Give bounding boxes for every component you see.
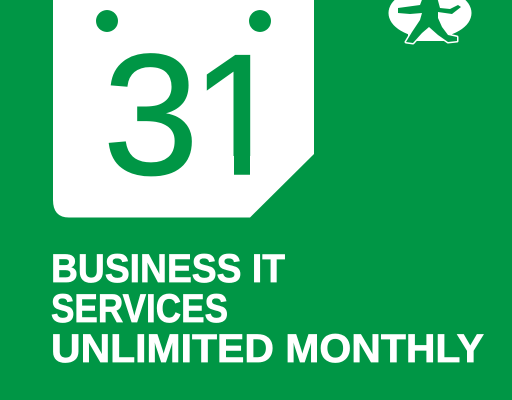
heading line 1: BUSINESS IT [51, 247, 285, 291]
icon: calendar [53, 0, 314, 218]
heading line 3: UNLIMITED MONTHLY [51, 327, 484, 371]
heading [51, 247, 484, 371]
logo: figure in speech bubble [388, 0, 472, 43]
calendar date number: 3 [103, 19, 199, 211]
figure [398, 0, 461, 43]
mask trimming the foot serif of the numeral one [194, 156, 285, 180]
bubble [388, 0, 472, 38]
heading line 2: SERVICES [51, 287, 228, 331]
calendar page [53, 0, 314, 218]
calendar date number: 1 [191, 19, 287, 211]
binding hole right [249, 10, 271, 32]
bubble lower fill [408, 30, 452, 41]
binding hole left [96, 10, 118, 32]
